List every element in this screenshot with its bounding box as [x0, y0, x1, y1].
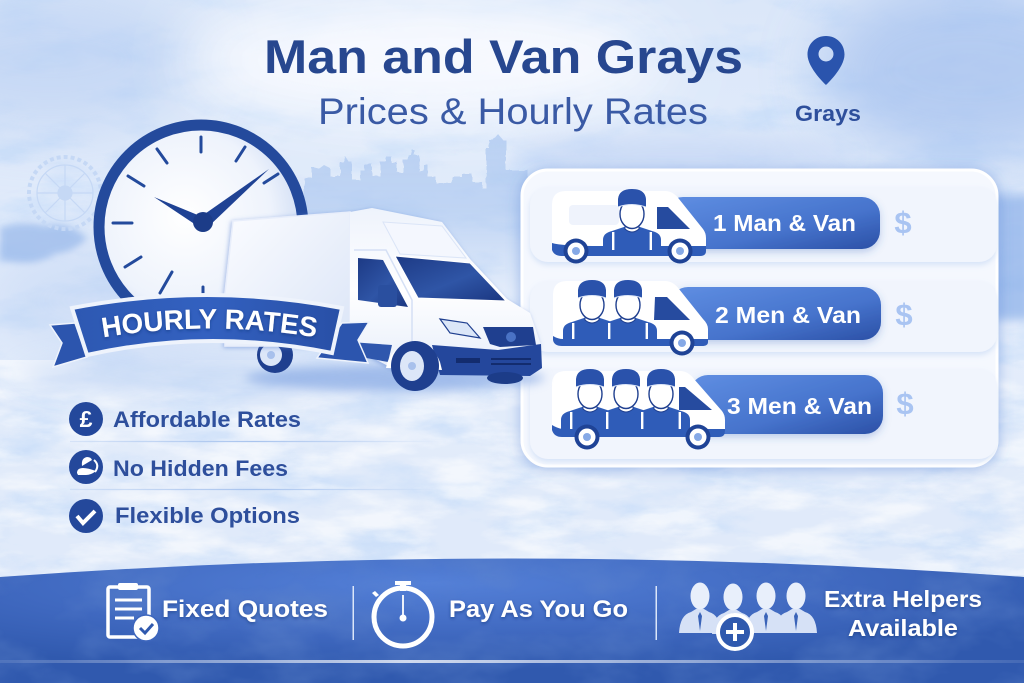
row: 3 men and van: 3 Men & Van	[727, 393, 872, 419]
icon: extra helpers group	[679, 582, 817, 649]
left hill	[0, 223, 87, 263]
title: Man and Van Grays	[264, 30, 743, 83]
row: 2 men and van: 2 Men & Van	[715, 302, 861, 328]
icon: wall clock	[99, 125, 303, 329]
front wheel	[386, 341, 442, 391]
feature: extra helpers available	[824, 586, 982, 641]
rear wheel	[257, 337, 293, 373]
benefits list	[69, 402, 440, 533]
benefit: flexible options: Flexible Options	[115, 503, 300, 528]
row: 2 men and van	[530, 280, 997, 356]
subtitle: Prices & Hourly Rates	[318, 91, 708, 132]
bumper	[432, 344, 542, 376]
footer band	[0, 555, 1024, 683]
windshield	[395, 256, 506, 301]
row: 1 man and van: 1 Man & Van	[713, 210, 856, 236]
feature: extra helpers available: Extra Helpers	[824, 586, 982, 612]
benefit: flexible options	[69, 499, 300, 533]
divider	[656, 586, 657, 640]
feature: fixed quotes: Fixed Quotes	[162, 596, 328, 623]
icon: location pin	[808, 36, 844, 85]
grille	[483, 327, 536, 347]
ferris wheel	[29, 157, 101, 229]
panel: pricing	[522, 170, 997, 466]
icon: clipboard	[108, 583, 159, 641]
headlight	[440, 319, 480, 338]
row: 1 man and van: $	[894, 205, 912, 240]
benefit: no hidden fees: No Hidden Fees	[113, 456, 288, 481]
van body	[225, 208, 541, 372]
divider	[352, 586, 354, 640]
benefit: affordable rates	[69, 402, 301, 436]
side window	[358, 258, 408, 307]
ribbon: hourly rates	[49, 293, 369, 368]
benefit: affordable rates: Affordable Rates	[113, 407, 301, 432]
row: 2 men and van: $	[895, 297, 913, 332]
row: 1 man and van	[530, 187, 997, 264]
row: 3 men and van: $	[896, 386, 914, 421]
ribbon: hourly rates: HOURLY RATES	[101, 309, 317, 340]
feature: extra helpers available: Available	[848, 615, 958, 641]
delivery van	[225, 208, 545, 391]
icon: stopwatch	[372, 581, 432, 646]
wing mirror	[378, 285, 397, 307]
ground shadow	[245, 365, 545, 391]
location label: Grays	[795, 101, 861, 126]
benefit: affordable rates: £	[80, 406, 93, 432]
row: 3 men and van	[530, 369, 997, 459]
feature: pay as you go: Pay As You Go	[449, 596, 628, 623]
city skyline	[304, 134, 528, 270]
benefit: no hidden fees	[69, 450, 288, 484]
